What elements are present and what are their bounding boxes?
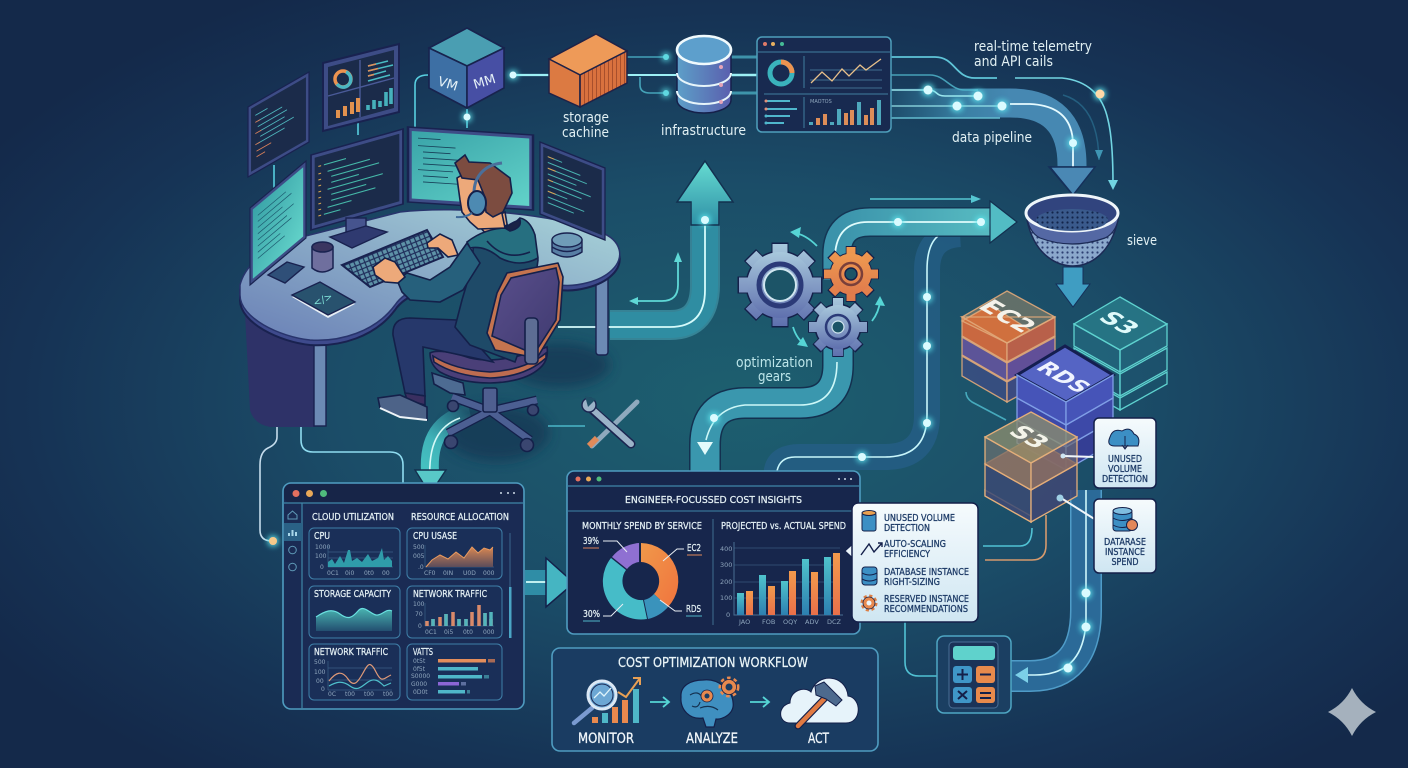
ear cup [468,191,486,215]
icon: notebook with code tag: </> [312,291,335,310]
callout: recommendations list [845,503,978,622]
card: CPU: 0 [320,564,324,571]
icon: storage container [549,34,627,107]
icon: database [862,567,877,585]
icon: database infrastructure [677,36,731,113]
icon: VM cube: VM [436,74,459,95]
icon: sparkle watermark [1328,688,1376,736]
hood [467,218,538,263]
card: CPU usage: 0IN [443,570,453,577]
bar chart [720,542,843,626]
label: real-time telemetry [974,39,1092,70]
callout: database instance spend [1056,494,1156,573]
card: watts: 0D0t [413,689,428,696]
label: data pipeline: data pipeline [952,130,1032,146]
bar chart: 300 [720,561,732,569]
card: CPU usage: 000 [483,570,495,577]
donut chart: RDS [686,604,701,615]
bar chart: 0 [726,611,730,619]
monitor: center teal [408,127,533,210]
arrow: gears down to insights dashboard [697,340,838,472]
card: network traffic bars: 0t0 [463,629,473,636]
card: network traffic bars: 0C1 [425,629,437,636]
icon: calculator [937,636,1011,713]
arrow [650,697,669,707]
label: optimization gears [736,355,813,385]
rotation arrows [790,227,885,347]
callout: recommendations list: RIGHT-SIZING [884,577,940,588]
card: network traffic lines: 500 [314,659,326,666]
orange gear [823,246,879,302]
panel: top mini dashboard: MAOTOS [810,99,832,105]
card: network traffic lines: t00 [383,691,393,698]
card: network traffic lines: 0C [328,691,336,698]
callout: recommendations list: EFFICIENCY [884,549,931,560]
card: watts: S0000 [411,673,430,680]
arrow: central up arrow from desk to infrastructure [558,161,733,327]
label: real-time telemetry: real-time telemetry [974,39,1092,55]
callout: unused volume detection: VOLUME [1108,464,1142,475]
scrollbar [509,533,511,587]
arm sleeve [397,243,480,302]
near shoe [378,395,427,420]
icon: autoscale [861,543,882,555]
scrollbar thumb [509,587,512,638]
bar chart: 400 [720,545,732,553]
ankle [405,393,425,405]
blue gear [808,297,868,357]
hood fold [487,241,530,255]
icon: notebook with code tag [292,282,355,318]
label: real-time telemetry: and API cails [974,54,1053,70]
icon: link dots [269,54,669,545]
stack: S3 front: S3 [1002,422,1056,452]
far hand [427,234,458,257]
card: CPU: 0i0 [345,570,354,577]
card: CPU usage: 005 [413,553,425,560]
bar chart: ADV [805,618,819,626]
arrow: gears to sieve [835,195,1017,280]
stack: EC2: EC2 [972,296,1043,337]
icon: phone on desk [268,262,304,283]
panel: cloud utilization dashboard [283,483,524,709]
panel: engineer-focussed cost insights: PROJECTED vs. ACTUAL SPEND [721,521,846,532]
callout: database instance spend: DATARASE [1104,537,1146,548]
card: network traffic bars: 70 [415,611,423,618]
icon: cup [312,242,333,272]
donut chart: 39% [583,536,599,547]
bar chart: DCZ [827,618,842,626]
collar [505,220,520,231]
chair back rim [487,263,563,358]
panel: cloud utilization dashboard: RESOURCE ALLOCATION [411,512,509,523]
hair [455,155,512,217]
icon: VM cube: MM [472,72,498,93]
callout: unused volume detection: DETECTION [1102,474,1148,485]
bar chart: OQY [783,618,797,626]
card: network traffic lines: t00 [364,691,374,698]
stack: RDS [1017,346,1113,470]
panel: engineer-focussed cost insights: MONTHLY SPEND BY SERVICE [582,521,702,532]
card: CPU: 0C1 [327,570,339,577]
card: network traffic bars: 0i5 [444,629,453,636]
card: network traffic lines [309,644,400,700]
arrow: right pipeline to calculator [1011,490,1090,683]
donut chart: EC2 [687,543,701,554]
card: network traffic bars: 000 [483,629,495,636]
bar chart: JAO [738,618,750,626]
bar chart: 100 [720,594,732,602]
card: CPU: CPU [314,531,330,542]
label: sieve: sieve [1127,233,1157,249]
stack: RDS: RDS [1030,359,1096,397]
icon: act cloud and hammer [781,678,858,726]
panel: cost optimization workflow: COST OPTIMIZATION WORKFLOW [618,656,808,671]
card: network traffic bars [407,586,502,638]
card: watts: 0f5t [413,666,426,673]
icon: VM cube [429,28,504,108]
bar chart: FOB [762,618,775,626]
callout: recommendations list: DATABASE INSTANCE [884,567,969,578]
card: CPU usage [407,528,502,579]
desk [240,210,620,427]
sidebar icons [284,511,302,571]
callout: unused volume detection: UNUSED [1108,454,1142,465]
callout: recommendations list: RESERVED INSTANCE [884,594,969,605]
card: CPU usage: CF0 [424,570,436,577]
callout: recommendations list: DETECTION [884,523,930,534]
arrow: lower long pipeline [777,234,960,471]
card: CPU: 1000 [315,544,330,551]
monitor: left teal [250,161,306,285]
donut chart [583,536,702,621]
chair back fabric [492,268,559,354]
label: optimization gears: gears [758,369,791,385]
stack: S3 back: S3 [1092,308,1146,338]
card: watts: VATTS [413,647,433,658]
icon: gear [862,596,876,610]
card: CPU usage: CPU USASE [413,531,457,542]
icon: spanner and screwdriver [582,396,637,446]
arrow: utilization to insights [525,558,574,607]
monitor: right code [540,142,605,240]
monitor: upper dashboard [323,44,399,131]
icon: volume [862,510,876,531]
arrow: small return arrow [629,252,682,305]
far shoe [432,373,465,395]
chair seat [430,347,547,383]
headset band [474,163,502,193]
monitor: center left code [311,129,403,230]
label: optimization gears: optimization [736,355,813,371]
arrow: sieve to stacks [1056,267,1090,307]
large gear [738,242,822,328]
panel: cost optimization workflow: MONITOR [578,731,634,747]
card: network traffic bars: 0 [418,623,422,630]
shoe sole [380,408,427,420]
label: infrastructure: infrastructure [661,123,746,139]
label: storage cachine: storage [563,110,609,126]
arrow: desk to utilization dashboard [415,413,470,494]
chair base [444,388,538,452]
card: CPU usage: U0D [463,570,476,577]
card: CPU usage: .0 [418,564,424,571]
stack: S3 front [985,412,1077,522]
connector lines: equipment links [260,57,1046,676]
chair shadow [445,343,610,461]
figure: engineer at desk [373,155,563,452]
donut chart: 30% [583,609,600,620]
stack: EC2 [962,291,1055,402]
panel: cost optimization workflow: ACT [808,731,829,747]
stack: S3 back [1074,297,1167,410]
panel: top mini dashboard [757,37,891,132]
icon: analyze brain [681,678,738,727]
leg [393,318,493,396]
callout: database instance spend: SPEND [1112,557,1139,568]
callout: recommendations list: RECOMMENDATIONS [884,604,968,615]
icon: keyboard [342,230,443,287]
chair support [525,318,538,364]
card: watts [407,644,502,700]
microphone [456,213,472,217]
icon: sieve [1026,167,1119,266]
chair seat stripe [433,353,546,378]
card: network traffic lines: 0 [321,686,325,693]
card: storage capacity [309,586,400,638]
panel: cost optimization workflow: ANALYZE [686,731,738,747]
icon: disc stack [552,233,582,257]
near hand [373,258,405,283]
callout: unused volume detection [1060,418,1156,488]
card: CPU: 00 [382,570,390,577]
card: CPU: 0t0 [364,570,374,577]
card: storage capacity: STORAGE CAPACITY [314,589,392,600]
panel: engineer-focussed cost insights: ENGINEER-FOCUSSED COST INSIGHTS [625,495,802,506]
face [457,170,505,229]
panel: cost optimization workflow [552,648,878,751]
callout: recommendations list: UNUSED VOLUME [884,513,955,524]
card: network traffic bars: NETWORK TRAFFIC [413,589,487,600]
label: storage cachine: cachine [562,125,609,141]
panel: engineer-focussed cost insights [567,471,860,634]
headings: CLOUD UTILIZATION [312,512,394,523]
card: network traffic lines: 00 [316,678,324,685]
icon: monitor [574,678,640,723]
arrow [750,697,769,707]
monitor stand [330,218,387,248]
card: network traffic lines: NETWORK TRAFFIC [314,647,388,658]
icon: optimization gears [738,227,885,357]
card: watts: 0t5t [413,658,426,665]
card: network traffic bars: 100 [413,601,425,608]
bar chart: 200 [720,578,732,586]
arrow: data pipeline band [891,57,1118,195]
card: watts: G000 [411,681,427,688]
card: network traffic lines: 100 [314,669,326,676]
callout: database instance spend: INSTANCE [1105,547,1145,558]
card: network traffic lines: t00 [345,691,355,698]
card: CPU usage: 500 [413,544,425,551]
callout: recommendations list: AUTO-SCALING [884,539,946,550]
monitor: far upper left [248,72,309,177]
label: storage cachine [562,110,609,141]
card: CPU: 100 [315,553,327,560]
card: CPU [309,528,400,579]
neck [478,212,508,238]
hoodie body [455,225,538,362]
